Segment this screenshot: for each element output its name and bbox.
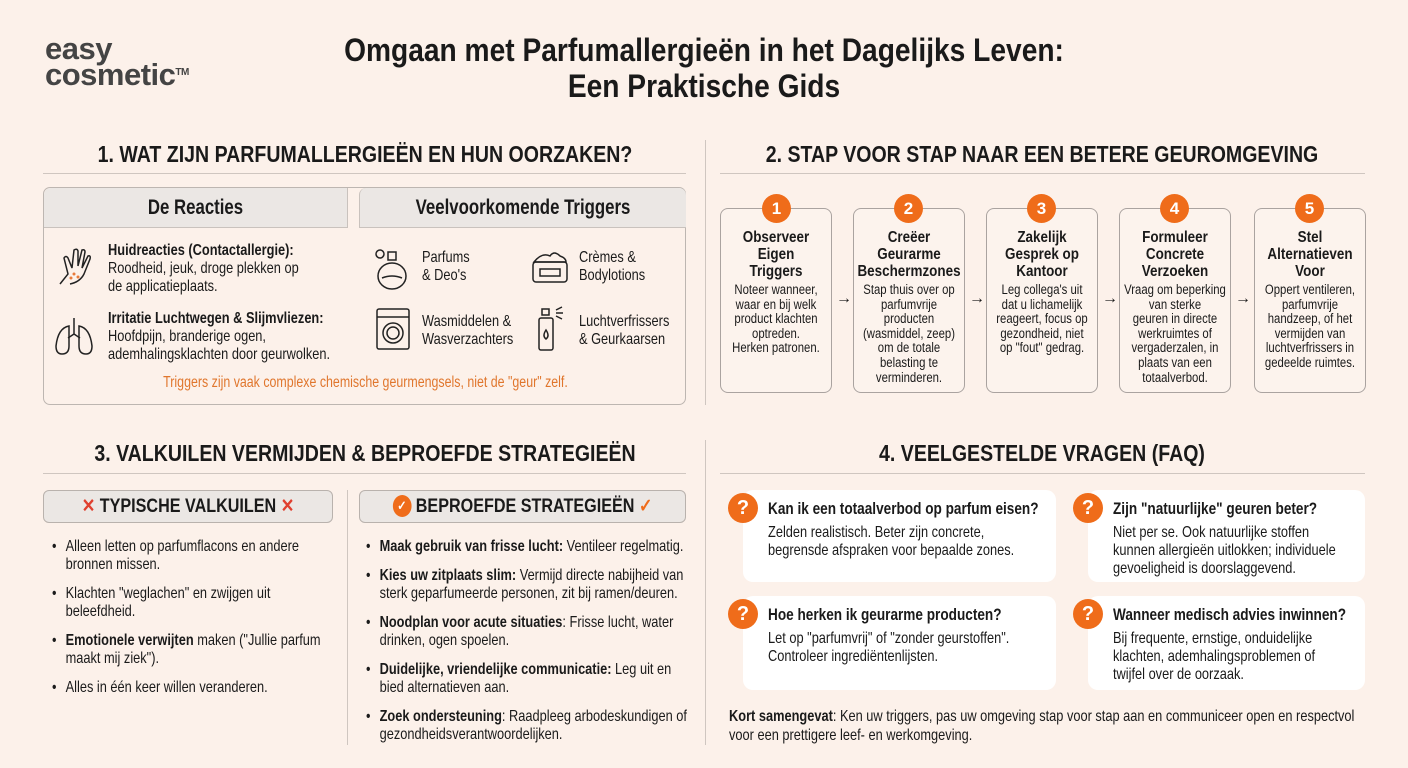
faq card 4: Bij frequente, ernstige, onduidelijke: [1113, 630, 1312, 647]
faq card 1: Zelden realistisch. Beter zijn concrete,: [768, 524, 984, 541]
step 5: vermijden van: [1275, 326, 1345, 341]
step 3: Gesprek op: [1005, 246, 1079, 263]
panel header: De Reacties: [44, 188, 348, 228]
step 3: [986, 208, 1098, 393]
step 4: geuren in directe: [1133, 311, 1217, 326]
step 4: totaalverbod.: [1142, 370, 1208, 385]
text: detergents: Wasverzachters: [422, 331, 513, 348]
step 4: werkruimtes of: [1138, 326, 1212, 341]
header: pitfalls: [43, 490, 333, 523]
step 2: parfumvrije: [881, 297, 937, 312]
title: Een Praktische Gids: [568, 68, 840, 104]
step 5: [1254, 208, 1366, 393]
text: 4: [1170, 199, 1179, 218]
text: →: [1102, 290, 1118, 307]
text: ?: [1082, 603, 1094, 625]
step 4: [1119, 208, 1231, 393]
step 3: Leg collega's uit: [1002, 282, 1082, 297]
step 1: waar en bij welk: [736, 297, 816, 312]
text: detergents: [422, 313, 513, 348]
list: strategies: Maak gebruik van frisse lucht: Ventileer regelmatig.: [380, 538, 683, 555]
text: skin: Huidreacties (Contactallergie):: [108, 242, 294, 259]
text: →: [1235, 290, 1251, 307]
logo: easy: [45, 31, 112, 66]
faq card 2: kunnen allergieën uitlokken; individuele: [1113, 542, 1336, 559]
panel header: triggers: Veelvoorkomende Triggers: [416, 196, 630, 219]
step 2: producten: [884, 311, 934, 326]
title: [344, 32, 1064, 104]
faq card 2: [1088, 490, 1365, 582]
section 4 heading: 4. VEELGESTELDE VRAGEN (FAQ): [879, 440, 1205, 466]
step 3: dat u lichamelijk: [1002, 297, 1082, 312]
text: skin: Roodheid, jeuk, droge plekken op: [108, 260, 299, 277]
faq card 3: Hoe herken ik geurarme producten?: [768, 605, 1002, 624]
step 5: handzeep, of het: [1268, 311, 1352, 326]
header: strategies: BEPROEFDE STRATEGIEËN ✓: [416, 496, 652, 517]
list: pitfalls: Alleen letten op parfumflacons en andere bronnen missen.: [66, 538, 299, 573]
list: strategies: [366, 538, 687, 743]
text: airways: Irritatie Luchtwegen & Slijmvliezen:: [108, 310, 324, 327]
step 1: Eigen: [758, 246, 794, 263]
text: fresheners: [579, 313, 669, 348]
step 5: parfumvrije: [1282, 297, 1338, 312]
faq card 4: [1088, 596, 1365, 690]
text: perfumes: [422, 249, 470, 284]
faq card 3: Controleer ingrediëntenlijsten.: [768, 648, 938, 665]
faq card 2: Niet per se. Ook natuurlijke stoffen: [1113, 524, 1309, 541]
text: creams: Crèmes &: [579, 249, 636, 266]
step 5: Alternatieven: [1267, 246, 1353, 263]
text: fresheners: Luchtverfrissers: [579, 313, 669, 330]
text: perfumes: & Deo's: [422, 267, 466, 284]
step 4: van sterke: [1149, 297, 1201, 312]
text: fresheners: & Geurkaarsen: [579, 331, 665, 348]
logo: cosmeticTM: [45, 57, 189, 92]
step 1: Observeer: [743, 229, 809, 246]
text: →: [969, 290, 985, 307]
step 4: Formuleer: [1142, 229, 1208, 246]
step 3: reageert, focus op: [996, 311, 1088, 326]
number badges: 1: [772, 199, 781, 218]
step 4: Concrete: [1146, 246, 1204, 263]
step 1: Triggers: [749, 263, 803, 280]
header: pitfalls: ✕ TYPISCHE VALKUILEN ✕: [82, 496, 294, 517]
faq card 2: gevoeligheid is doorslaggevend.: [1113, 560, 1296, 577]
step 5: luchtverfrissers in: [1266, 340, 1354, 355]
text: skin: [108, 242, 299, 295]
icon: perfume: [375, 249, 407, 290]
step 1: Herken patronen.: [732, 340, 820, 355]
text: airways: Hoofdpijn, branderige ogen,: [108, 328, 266, 345]
text: perfumes: Parfums: [422, 249, 470, 266]
faq card 3: [743, 596, 1056, 690]
faq card 4: twijfel over de oorzaak.: [1113, 666, 1244, 683]
text: airways: ademhalingsklachten door geurwolken.: [108, 346, 330, 363]
section 3 heading: 3. VALKUILEN VERMIJDEN & BEPROEFDE STRATEGIEËN: [94, 440, 636, 466]
step 2: [853, 208, 965, 393]
step 1: optreden.: [752, 326, 800, 341]
panel header: De Reacties: De Reacties: [148, 196, 243, 219]
step 2: (wasmiddel, zeep): [863, 326, 955, 341]
text: 2: [904, 199, 913, 218]
arrows: →: [836, 290, 852, 307]
step 1: [720, 208, 832, 393]
list: strategies: Noodplan voor acute situaties: Frisse lucht, water drinken, ogen spoelen.: [380, 614, 673, 649]
step 2: Creëer: [888, 229, 930, 246]
step 3: op "fout" gedrag.: [1000, 340, 1084, 355]
question icons: ?: [737, 497, 749, 519]
step 2: Stap thuis over op: [863, 282, 955, 297]
icon: washing machine: [376, 308, 410, 350]
list: pitfalls: Emotionele verwijten maken ("Jullie parfum maakt mij ziek").: [66, 632, 321, 667]
list: pitfalls: [52, 538, 321, 696]
step 1: Noteer wanneer,: [734, 282, 818, 297]
step 2: Geurarme: [877, 246, 941, 263]
text: 3: [1037, 199, 1046, 218]
faq card 1: [743, 490, 1056, 582]
section 2 heading: 2. STAP VOOR STAP NAAR EEN BETERE GEUROMGEVING: [766, 141, 1318, 167]
faq card 4: Wanneer medisch advies inwinnen?: [1113, 605, 1346, 624]
title: Omgaan met Parfumallergieën in het Dagelijks Leven:: [344, 32, 1064, 68]
text: detergents: Wasmiddelen &: [422, 313, 511, 330]
text: airways: [108, 310, 330, 363]
faq card 3: Let op "parfumvrij" of "zonder geurstoffen".: [768, 630, 1009, 647]
faq card 4: klachten, ademhalingsproblemen of: [1113, 648, 1315, 665]
faq card 1: begrensde afspraken voor bepaalde zones.: [768, 542, 1014, 559]
summary: Kort samengevat: Ken uw triggers, pas uw omgeving stap voor stap aan en communiceer open en respectvol: [729, 708, 1354, 725]
step 1: product klachten: [734, 311, 818, 326]
list: strategies: Zoek ondersteuning: Raadpleeg arbodeskundigen of gezondheidsverantwoordelijken.: [380, 708, 687, 743]
text: ?: [737, 603, 749, 625]
step 4: Verzoeken: [1142, 263, 1208, 280]
panel: causes: [43, 187, 686, 405]
step 4: plaats van een: [1138, 355, 1212, 370]
step 2: Beschermzones: [857, 263, 961, 280]
step 3: Kantoor: [1016, 263, 1068, 280]
step 2: belasting te: [880, 355, 938, 370]
text: skin: de applicatieplaats.: [108, 278, 218, 295]
text: creams: Bodylotions: [579, 267, 645, 284]
step 5: Stel: [1298, 229, 1322, 246]
faq card 2: Zijn "natuurlijke" geuren beter?: [1113, 499, 1317, 518]
icon: cream jar: [532, 252, 568, 283]
section 1 heading: 1. WAT ZIJN PARFUMALLERGIEËN EN HUN OORZAKEN?: [98, 141, 632, 167]
step 2: om de totale: [878, 340, 940, 355]
icon: hand: [60, 248, 91, 285]
text: 5: [1305, 199, 1314, 218]
text: creams: [579, 249, 645, 284]
logo: [45, 31, 189, 92]
list: strategies: Duidelijke, vriendelijke communicatie: Leg uit en bied alternatieven aan.: [380, 661, 671, 696]
number badges: [762, 194, 791, 223]
list: pitfalls: Klachten "weglachen" en zwijgen uit beleefdheid.: [66, 585, 270, 620]
step 5: Oppert ventileren,: [1265, 282, 1355, 297]
question icons: [728, 493, 758, 523]
text: ?: [1082, 497, 1094, 519]
step 4: vergaderzalen, in: [1131, 340, 1218, 355]
header: strategies: ✓: [397, 498, 407, 513]
list: pitfalls: Alles in één keer willen veranderen.: [66, 679, 268, 696]
note: Triggers zijn vaak complexe chemische geurmengsels, niet de "geur" zelf.: [163, 374, 568, 391]
step 5: gedeelde ruimtes.: [1265, 355, 1355, 370]
step 3: gezondheid, niet: [1000, 326, 1084, 341]
summary: voor een prettigere leef- en werkomgeving.: [729, 727, 972, 744]
step 2: verminderen.: [876, 370, 942, 385]
step 4: Vraag om beperking: [1124, 282, 1226, 297]
list: strategies: Kies uw zitplaats slim: Vermijd directe nabijheid van sterk geparfumeerde personen, zit bij ramen/deuren.: [380, 567, 683, 602]
panel header: triggers: [359, 188, 686, 228]
header: strategies: [359, 490, 686, 523]
step 5: Voor: [1295, 263, 1325, 280]
icon: lungs: [55, 318, 93, 355]
faq card 1: Kan ik een totaalverbod op parfum eisen?: [768, 499, 1039, 518]
icon: spray: [538, 306, 563, 351]
step 3: Zakelijk: [1017, 229, 1067, 246]
summary: [729, 708, 1354, 744]
